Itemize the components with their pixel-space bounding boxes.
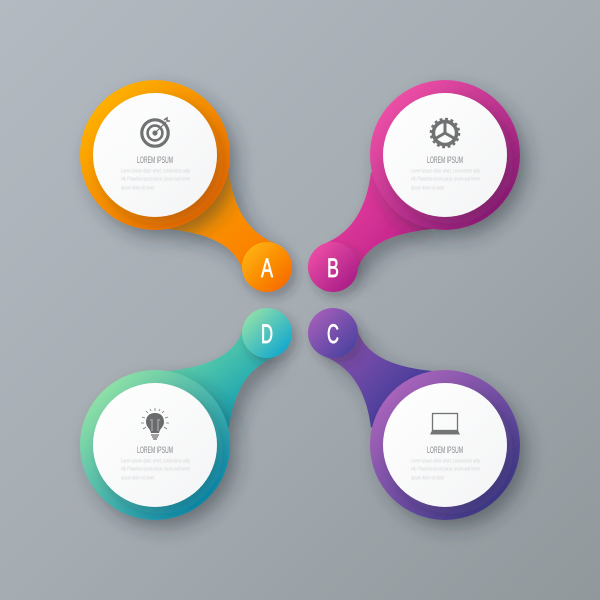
badge B [308,242,358,292]
body text D: ipsum dolor sit amet [121,476,154,482]
panel: A orange [80,80,292,292]
badge D [242,308,292,358]
connector C [326,326,432,428]
white disc C [383,383,507,507]
body text C [411,458,480,482]
ring A [80,80,230,230]
connector A [168,172,274,274]
badge C [308,308,358,358]
body text A: elit. Phasellus ipsum purus, ipsum and lorem [121,176,190,182]
body text C: ipsum dolor sit amet [411,476,444,482]
body text A: Lorem ipsum dolor amet, consectetur adip [121,168,190,174]
body text C: Lorem ipsum dolor amet, consectetur adip [411,458,480,464]
icon: light bulb [141,408,169,439]
ring D [80,370,230,520]
panel: C purple [308,308,520,520]
body text D: elit. Phasellus ipsum purus, ipsum and lorem [121,466,190,472]
body text D: Lorem ipsum dolor amet, consectetur adip [121,458,190,464]
connector B [326,172,432,274]
panel: D teal [80,308,292,520]
icon: target [142,118,170,146]
body text B [411,168,480,192]
panel: B pink [308,80,520,292]
body text B: ipsum dolor sit amet [411,186,444,192]
body text B: elit. Phasellus ipsum purus, ipsum and lorem [411,176,480,182]
icon: laptop [430,414,460,434]
heading A: LOREM IPSUM [137,155,173,165]
badge B: B [327,253,339,283]
badge C: C [327,319,339,349]
badge D: D [261,319,273,349]
icon: gear [431,119,459,147]
ring B [370,80,520,230]
heading B: LOREM IPSUM [427,155,463,165]
heading C: LOREM IPSUM [427,445,463,455]
connector D [168,326,274,428]
white disc A [93,93,217,217]
white disc D [93,383,217,507]
ring C [370,370,520,520]
body text B: Lorem ipsum dolor amet, consectetur adip [411,168,480,174]
body text A [121,168,190,192]
badge A [242,242,292,292]
white disc B [383,93,507,217]
body text C: elit. Phasellus ipsum purus, ipsum and lorem [411,466,480,472]
body text A: ipsum dolor sit amet [121,186,154,192]
badge A: A [261,253,273,283]
body text D [121,458,190,482]
heading D: LOREM IPSUM [137,445,173,455]
